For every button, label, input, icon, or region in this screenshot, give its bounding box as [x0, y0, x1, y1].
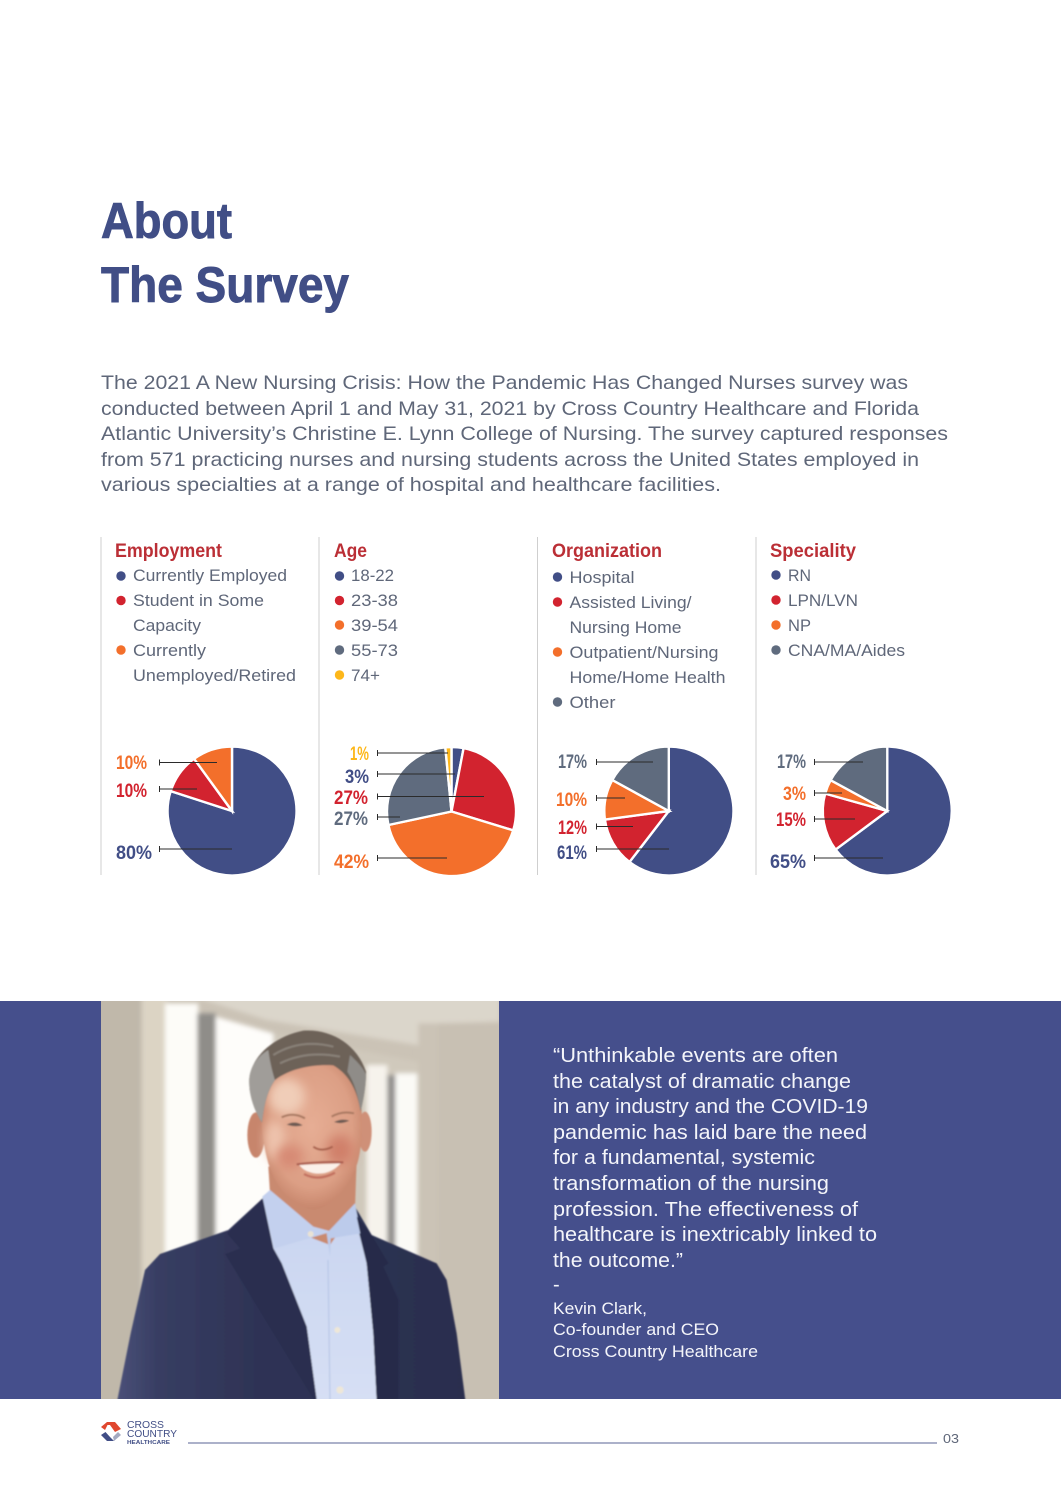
callouts: employment: 80% [116, 843, 152, 864]
panel: speciality [770, 541, 952, 876]
legend: employment [116, 566, 296, 685]
legend: employment: Currently [133, 641, 207, 660]
heading: speciality: Speciality [770, 541, 856, 562]
legend: age [335, 566, 398, 685]
footer logo: CROSS [127, 1419, 164, 1431]
legend: organization: Nursing Home [570, 618, 682, 637]
quote text: for a fundamental, systemic [553, 1147, 815, 1169]
callouts: employment: 10% [116, 781, 147, 802]
callouts: speciality: 65% [770, 852, 806, 873]
ears [247, 1112, 265, 1158]
title: The Survey [101, 257, 349, 313]
title: About [101, 193, 232, 249]
callouts: speciality: 3% [783, 784, 806, 805]
nose [313, 1147, 333, 1150]
footer logo [101, 1419, 177, 1446]
callouts: organization: 17% [558, 752, 587, 773]
quote text: the outcome.” [553, 1250, 683, 1272]
legend: organization [553, 568, 726, 712]
legend: organization: Home/Home Health [570, 668, 726, 687]
pie chart: speciality [823, 746, 952, 876]
footer logo: HEALTHCARE [127, 1440, 170, 1446]
pie chart: employment [168, 746, 297, 876]
callouts: age: 42% [334, 852, 369, 873]
quote attribution: Kevin Clark, [553, 1299, 647, 1318]
intro paragraph [101, 372, 948, 496]
legend: speciality: LPN/LVN [788, 591, 858, 610]
pie chart: organization [604, 746, 733, 875]
callouts: organization: 10% [556, 790, 587, 811]
intro paragraph: from 571 practicing nurses and nursing students across the United States employed in [101, 449, 919, 471]
face [262, 1064, 362, 1198]
callouts: organization: 61% [557, 843, 587, 864]
callouts: speciality [770, 752, 883, 873]
callouts: organization: 12% [558, 818, 587, 839]
neck [268, 1160, 357, 1245]
heading: age: Age [334, 541, 367, 562]
legend: age: 23-38 [351, 591, 398, 610]
panel: employment [115, 541, 297, 876]
callouts: employment [116, 753, 232, 864]
intro paragraph: various specialties at a range of hospital and healthcare facilities. [101, 474, 721, 496]
legend: employment: Capacity [133, 616, 202, 635]
callouts: organization [556, 752, 669, 864]
intro paragraph: Atlantic University’s Christine E. Lynn College of Nursing. The survey captured responses [101, 423, 948, 445]
quote band [0, 993, 1061, 1407]
intro paragraph: conducted between April 1 and May 31, 2021 by Cross Country Healthcare and Florida [101, 398, 919, 420]
legend: organization: Other [570, 693, 616, 712]
legend: age: 74+ [351, 666, 380, 685]
legend: speciality: RN [788, 566, 811, 585]
photo: Kevin Clark portrait [93, 993, 505, 1407]
hair [248, 1030, 367, 1103]
legend: speciality: NP [788, 616, 811, 635]
callouts: employment: 10% [116, 753, 147, 774]
shirt [262, 1197, 377, 1400]
callouts: age: 1% [350, 744, 369, 765]
legend: employment: Student in Some [133, 591, 264, 610]
legend: organization: Outpatient/Nursing [570, 643, 718, 662]
quote attribution [553, 1299, 758, 1361]
quote text: pandemic has laid bare the need [553, 1122, 867, 1144]
callouts: age: 27% [334, 809, 368, 830]
legend: age: 55-73 [351, 641, 398, 660]
panel: organization [552, 541, 733, 875]
legend: age: 39-54 [351, 616, 398, 635]
quote text: in any industry and the COVID-19 [553, 1096, 868, 1118]
legend: organization: Assisted Living/ [570, 593, 692, 612]
panel: age [334, 541, 516, 876]
quote attribution: Co-founder and CEO [553, 1320, 719, 1339]
legend: speciality [771, 566, 905, 660]
quote text: - [553, 1274, 560, 1296]
callouts: age: 3% [345, 767, 369, 788]
callouts: speciality: 15% [776, 810, 806, 831]
legend: organization: Hospital [570, 568, 634, 587]
quote text [553, 1045, 877, 1296]
legend: employment: Currently Employed [133, 566, 287, 585]
quote text: profession. The effectiveness of [553, 1199, 858, 1221]
legend: employment: Unemployed/Retired [133, 666, 296, 685]
pie chart: age [387, 747, 516, 876]
title [101, 193, 349, 313]
callouts: speciality: 17% [777, 752, 806, 773]
quote text: healthcare is inextricably linked to [553, 1224, 877, 1246]
quote text: transformation of the nursing [553, 1173, 829, 1195]
quote attribution: Cross Country Healthcare [553, 1342, 758, 1361]
collars [262, 1190, 330, 1238]
callouts: age [334, 744, 484, 873]
heading: organization: Organization [552, 541, 662, 562]
legend: speciality: CNA/MA/Aides [788, 641, 905, 660]
eyes [287, 1122, 303, 1126]
heading: employment: Employment [115, 541, 223, 562]
footer logo: COUNTRY [127, 1428, 177, 1440]
legend: age: 18-22 [351, 566, 394, 585]
page number: 03 [943, 1431, 959, 1446]
jacket [117, 1198, 465, 1400]
mouth [299, 1163, 341, 1174]
intro paragraph: The 2021 A New Nursing Crisis: How the Pandemic Has Changed Nurses survey was [101, 372, 908, 394]
quote text: “Unthinkable events are often [553, 1045, 838, 1067]
quote text: the catalyst of dramatic change [553, 1071, 851, 1093]
callouts: age: 27% [334, 788, 368, 809]
lapels [225, 1198, 317, 1400]
